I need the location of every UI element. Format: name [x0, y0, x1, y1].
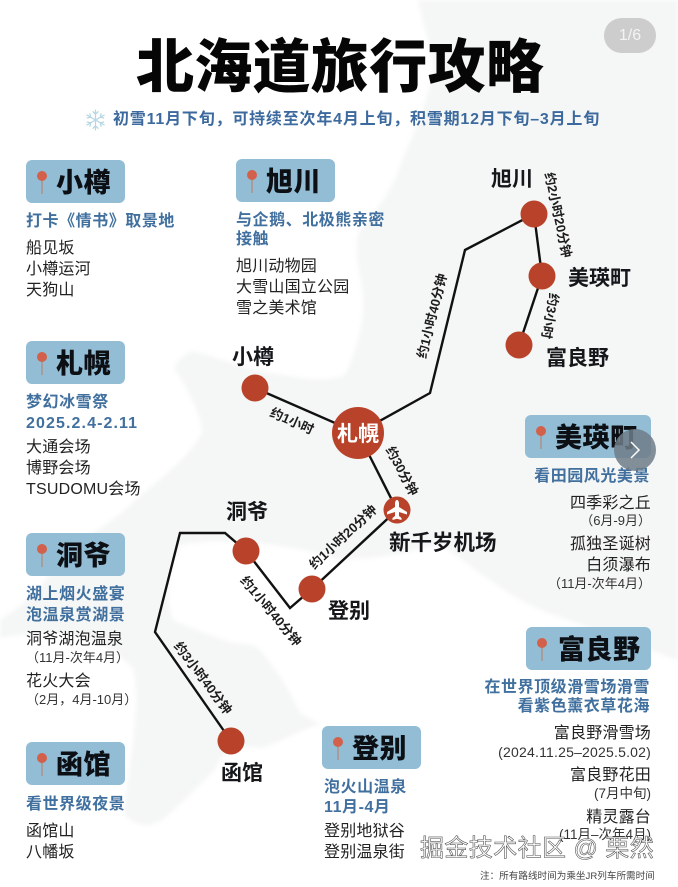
panel: Furano: 精灵露台 — [586, 809, 651, 826]
Asahikawa tagline — [236, 211, 385, 248]
Asahikawa tagline: 接触 — [236, 231, 269, 248]
Hakodate places: 函馆山 — [26, 823, 75, 840]
station labels: 富良野 — [546, 346, 609, 370]
station labels: 美瑛町 — [568, 267, 631, 290]
Furano tagline: 在世界顶级滑雪场滑雪 — [484, 679, 650, 696]
Sapporo places: 大通会场 — [26, 439, 91, 456]
Noboribetsu tagline: 泡火山温泉 — [324, 779, 407, 796]
panel: Furano: 富良野花田 — [570, 767, 651, 784]
travel time labels: 约1小时 — [268, 405, 316, 437]
subtitle text: 初雪11月下旬，可持续至次年4月上旬，积雪期12月下旬–3月上旬 — [113, 111, 600, 128]
Noboribetsu tagline — [324, 778, 407, 816]
next arrow button — [614, 429, 656, 471]
panel: Furano: (11月–次年4月) — [559, 827, 651, 842]
heading: Noboribetsu: 登别 — [352, 734, 407, 764]
Asahikawa tagline: 与企鹅、北极熊亲密 — [236, 212, 385, 229]
heading: Asahikawa: 旭川 — [266, 167, 321, 197]
panel: Furano: (2024.11.25–2025.5.02) — [498, 744, 651, 760]
icon: airplane — [387, 500, 407, 520]
station labels — [221, 168, 631, 785]
Noboribetsu places: 登别温泉街 — [324, 844, 405, 861]
Furano tagline — [484, 678, 650, 715]
Asahikawa places — [236, 257, 349, 317]
station labels: 洞爷 — [226, 501, 268, 524]
panel: Otaru — [26, 160, 175, 299]
Toya tagline — [26, 584, 125, 624]
panel: Biei: 孤独圣诞树 — [570, 536, 651, 553]
panel: Biei: （11月-次年4月） — [548, 576, 651, 591]
Noboribetsu places: 登别地狱谷 — [324, 823, 405, 840]
Otaru places: 天狗山 — [26, 282, 75, 299]
Otaru places: 船见坂 — [26, 240, 75, 257]
travel time labels: 约1小时20分钟 — [306, 502, 380, 572]
watermark: 掘金技术社区 @ 栗然 — [420, 835, 654, 862]
Biei places: 四季彩之丘 — [570, 495, 651, 512]
panel: Biei — [525, 415, 651, 591]
route lines — [155, 214, 542, 741]
Sapporo places: TSUDOMU会场 — [26, 481, 141, 498]
page counter badge: 1/6 — [619, 27, 641, 44]
Asahikawa places: 大雪山国立公园 — [236, 279, 349, 296]
Sapporo tagline — [26, 393, 138, 432]
Toya tagline: 湖上烟火盛宴 — [26, 586, 125, 603]
Sapporo places: 博野会场 — [26, 460, 91, 477]
Noboribetsu places — [324, 822, 405, 861]
Otaru places: 小樽运河 — [26, 261, 91, 278]
station labels: 小樽 — [232, 346, 274, 369]
icon: chevron — [630, 442, 640, 458]
Toya places: 洞爷湖泡温泉 — [26, 631, 123, 648]
Hakodate places: 八幡坂 — [26, 844, 75, 861]
panel: Noboribetsu — [322, 726, 421, 861]
Toya tagline: 泡温泉赏湖景 — [26, 607, 125, 624]
heading: Furano — [526, 627, 651, 670]
panel: Furano: (7月中旬) — [594, 786, 651, 801]
station labels: 新千岁机场 — [389, 531, 497, 555]
travel time labels — [171, 171, 574, 717]
Noboribetsu tagline: 11月-4月 — [324, 799, 390, 816]
title: 北海道旅行攻略 — [136, 35, 544, 100]
Furano places: 富良野滑雪场 — [554, 725, 651, 742]
heading: Biei: 美瑛町 — [555, 423, 638, 453]
panel: Asahikawa — [236, 159, 385, 317]
travel time labels: 约1小时40分钟 — [414, 272, 450, 360]
panel: Toya — [26, 533, 137, 707]
heading: Toya: 洞爷 — [56, 541, 111, 571]
panel: Toya: （11月-次年4月） — [26, 650, 129, 665]
panel: Sapporo — [26, 341, 141, 498]
Otaru places — [26, 239, 91, 299]
panel: Biei: 白须瀑布 — [586, 557, 651, 574]
Sapporo tagline: 2025.2.4-2.11 — [26, 415, 138, 432]
heading: Sapporo: 札幌 — [56, 349, 111, 379]
panel: Biei: （6月-9月） — [580, 513, 651, 528]
heading: Biei — [525, 415, 651, 458]
subtitle with snowflake — [86, 110, 600, 130]
Sapporo places — [26, 438, 141, 498]
heading: Toya — [26, 533, 125, 576]
heading: Otaru — [26, 160, 125, 203]
heading: Furano: 富良野 — [558, 635, 640, 665]
Otaru tagline: 打卡《情书》取景地 — [26, 213, 175, 230]
panel: Toya: 花火大会 — [26, 673, 91, 690]
Sapporo tagline: 梦幻冰雪祭 — [26, 394, 109, 411]
heading: Sapporo — [26, 341, 125, 384]
station labels: 登别 — [328, 600, 370, 623]
travel time labels: 约3小时 — [539, 292, 561, 340]
heading: Hakodate: 函馆 — [56, 750, 111, 780]
Hakodate tagline: 看世界级夜景 — [26, 796, 125, 813]
Asahikawa places: 旭川动物园 — [236, 258, 317, 275]
panel: Furano — [484, 627, 651, 842]
travel time labels: 约2小时20分钟 — [542, 171, 574, 259]
heading: Noboribetsu — [322, 726, 421, 769]
station labels: 函馆 — [221, 762, 263, 785]
panel: Toya: （2月，4月-10月） — [26, 692, 137, 707]
page counter badge — [604, 18, 656, 53]
heading: Asahikawa — [236, 159, 335, 202]
travel time labels: 约1小时40分钟 — [237, 573, 305, 649]
station nodes — [218, 200, 556, 754]
heading: Hakodate — [26, 742, 125, 785]
label: Sapporo in node: 札幌 — [337, 423, 379, 446]
Hakodate places — [26, 822, 75, 861]
icon: snowflake — [86, 110, 105, 130]
footnote: 注：所有路线时间为乘坐JR列车所需时间 — [480, 871, 655, 882]
Asahikawa places: 雪之美术馆 — [236, 300, 317, 317]
heading: Otaru: 小樽 — [56, 168, 111, 198]
travel time labels: 约30分钟 — [383, 444, 421, 498]
panel: Hakodate — [26, 742, 125, 861]
Furano tagline: 看紫色薰衣草花海 — [518, 698, 650, 715]
travel time labels: 约3小时40分钟 — [171, 639, 235, 717]
Biei tagline: 看田园风光美景 — [534, 468, 650, 485]
station labels: 旭川 — [491, 168, 533, 191]
